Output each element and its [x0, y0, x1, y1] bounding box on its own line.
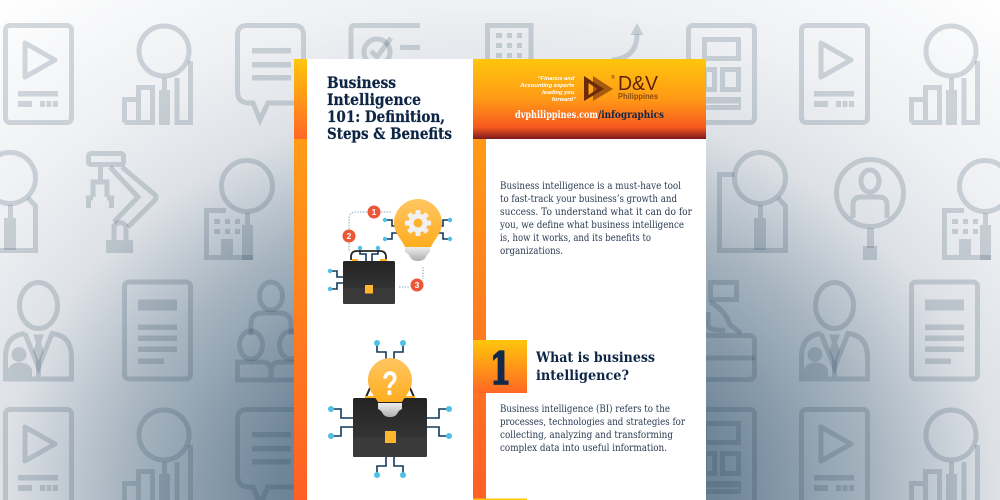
title: Intelligence	[327, 90, 421, 109]
background icon: building	[488, 26, 531, 70]
background icon: business person right	[802, 282, 868, 379]
header band	[473, 59, 706, 139]
title: 101: Definition,	[327, 107, 445, 126]
background icon: team people	[238, 282, 305, 380]
circuit wires	[331, 343, 449, 475]
background icon: magnifier building	[206, 160, 272, 260]
logo: D&V Philippines	[584, 72, 659, 101]
illustration: bulb, briefcase and steps	[328, 199, 452, 304]
circuit wires on bulb	[330, 220, 450, 289]
dotted step connectors	[349, 212, 423, 287]
question lightbulb: ?	[382, 365, 398, 403]
intro text: you, we define what business intelligence	[499, 219, 684, 231]
background icon: magnifier chart right	[912, 26, 978, 125]
background icon: document right	[912, 282, 978, 379]
illustration: question bulb on briefcase	[328, 340, 452, 478]
website url: dvphilippines.com	[515, 109, 598, 121]
section heading: intelligence?	[536, 368, 629, 384]
step number box: 1	[490, 344, 511, 395]
background icon: speech bubble	[238, 26, 304, 120]
logo: D&V Philippines: Philippines	[618, 92, 659, 101]
tagline: leading you	[542, 90, 575, 96]
logo: D&V Philippines: ®	[611, 74, 615, 81]
section body text: collecting, analyzing and transforming	[500, 429, 673, 441]
tagline: forward”	[552, 97, 576, 103]
background icon: growth arrow	[612, 23, 644, 60]
circuit nodes	[328, 340, 452, 478]
background icon: robot arm	[88, 154, 156, 253]
tagline: “Finance and	[538, 76, 575, 82]
background icon: speech bubble bottom	[238, 410, 304, 500]
background icon: document	[124, 282, 190, 379]
background icon: layout document	[688, 26, 754, 122]
background icon: magnifier chart bottom	[124, 410, 190, 500]
background icon: hand with card	[690, 282, 755, 380]
title: Business	[327, 73, 396, 92]
infographic panel	[294, 59, 706, 500]
background icon: checklist	[351, 26, 420, 70]
background icon: magnifier chart bottom right	[912, 410, 978, 500]
step number box	[473, 340, 527, 395]
background icon: magnifier document right	[720, 152, 786, 250]
background icon: business person	[6, 282, 72, 379]
step badge 3: 3	[415, 280, 420, 290]
intro text: is, how it works, and its benefits to	[500, 232, 651, 244]
website url: /infographics	[598, 109, 664, 121]
next step box top edge	[473, 498, 527, 500]
section body text: processes, technologies and strategies for	[500, 416, 685, 428]
section body text: complex data into useful information.	[500, 442, 667, 454]
lightbulb with gear	[394, 199, 442, 261]
briefcase	[353, 388, 427, 457]
title: Steps & Benefits	[327, 124, 452, 143]
background icon: video document right	[802, 26, 868, 122]
section body text: Business intelligence (BI) refers to the	[500, 403, 670, 415]
background icon: layout document bottom	[688, 410, 754, 500]
background icon: magnifier building right	[944, 160, 1000, 260]
briefcase	[343, 251, 395, 304]
intro text: to fast-track your business’s growth and	[500, 193, 677, 205]
step badge 2: 2	[347, 231, 352, 241]
section heading: What is business	[535, 350, 655, 366]
logo: D&V Philippines: D&V	[618, 72, 658, 95]
tagline: Accounting experts	[519, 83, 575, 89]
background icon: video document bottom	[6, 410, 72, 500]
background icon: magnifier chart	[124, 26, 190, 125]
background icon: video document	[6, 26, 72, 122]
intro text: organizations.	[500, 245, 563, 257]
background icon: video document bottom right	[802, 410, 868, 500]
background icon: magnifier document left	[0, 152, 36, 250]
intro text: Business intelligence is a must-have tool	[500, 180, 681, 192]
intro text: success. To understand what it can do for	[500, 206, 692, 218]
step badge 1: 1	[372, 207, 377, 217]
background icon: magnifier person	[836, 160, 904, 260]
centre orange strip	[473, 139, 486, 500]
left orange strip	[294, 59, 307, 500]
circuit nodes	[328, 218, 452, 291]
